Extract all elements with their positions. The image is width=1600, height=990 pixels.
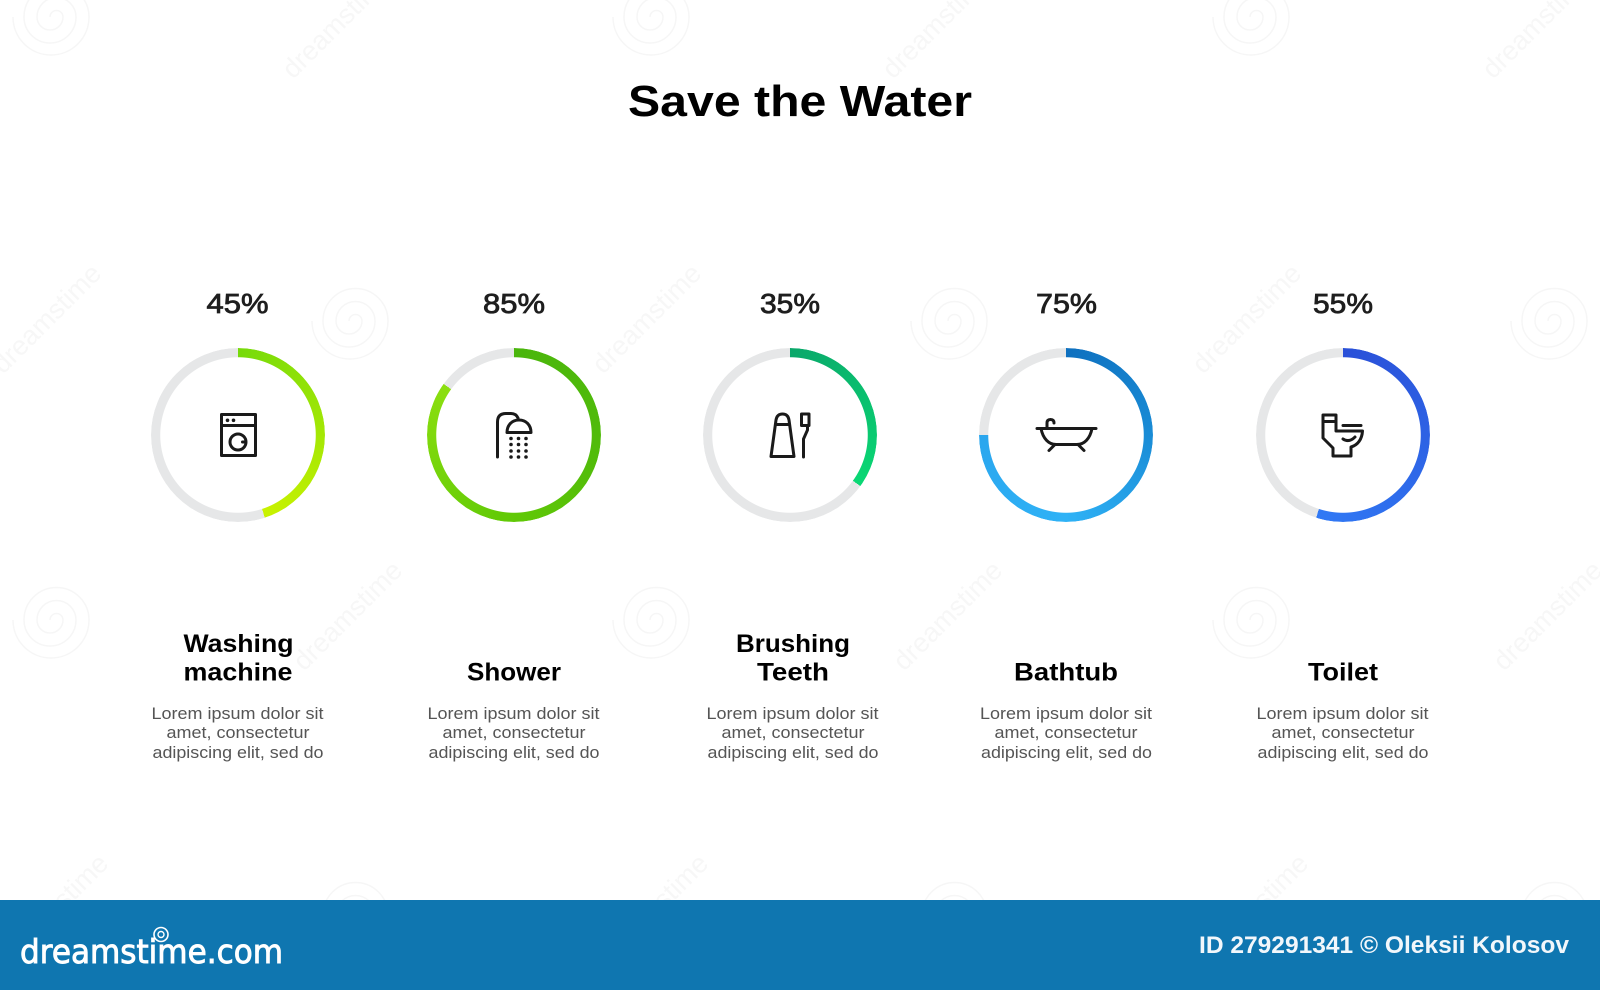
donut chart: 75%	[979, 348, 1153, 522]
heading: machine	[183, 658, 292, 686]
description: Lorem ipsum dolor sit	[706, 705, 879, 723]
panel: washing machine	[151, 288, 325, 762]
watermark pattern: dreamstime	[1193, 848, 1314, 969]
heading	[183, 630, 293, 686]
description: adipiscing elit, sed do	[428, 744, 600, 762]
footer bar	[0, 900, 1600, 990]
percentage: 55%	[1313, 288, 1373, 319]
panel: brushing teeth	[703, 288, 879, 762]
description	[151, 705, 323, 762]
description	[1256, 705, 1429, 762]
description: Lorem ipsum dolor sit	[428, 705, 600, 723]
watermark pattern: dreamstime	[887, 555, 1008, 676]
panel: toilet	[1256, 288, 1430, 762]
icon: washing machine	[221, 414, 255, 456]
heading: Brushing	[736, 630, 850, 658]
percentage: 45%	[206, 288, 268, 319]
watermark pattern: dreamstime	[586, 258, 707, 379]
description: Lorem ipsum dolor sit	[1256, 705, 1429, 723]
description	[706, 705, 879, 762]
heading: Shower	[467, 658, 561, 686]
description: amet, consectetur	[166, 724, 310, 742]
percentage: 85%	[483, 288, 545, 319]
panel: bathtub	[979, 288, 1153, 762]
description: Lorem ipsum dolor sit	[980, 705, 1152, 723]
description: amet, consectetur	[722, 724, 865, 742]
panel: shower	[427, 288, 601, 762]
percentage: 35%	[760, 288, 820, 319]
description: adipiscing elit, sed do	[981, 744, 1152, 762]
donut chart: 45%	[150, 348, 324, 522]
watermark pattern: dreamstime	[287, 555, 408, 676]
donut chart: 35%	[703, 348, 877, 522]
heading	[736, 630, 850, 686]
watermark pattern: dreamstime	[1186, 258, 1307, 379]
icon: toilet	[1323, 415, 1362, 456]
logo: dreamstime: dreamstime.com	[20, 932, 283, 971]
heading: Bathtub	[1014, 658, 1118, 686]
watermark pattern: dreamstime	[593, 848, 714, 969]
heading: Washing	[183, 630, 293, 658]
icon: bathtub	[1037, 420, 1096, 450]
icon: toothpaste and brush	[771, 414, 809, 457]
description: amet, consectetur	[1272, 724, 1415, 742]
donut chart: 85%	[427, 348, 601, 522]
description: adipiscing elit, sed do	[1258, 744, 1428, 762]
donut chart: 55%	[1256, 348, 1430, 522]
description	[980, 705, 1152, 762]
description	[428, 705, 600, 762]
description: adipiscing elit, sed do	[708, 744, 878, 762]
icon: shower	[498, 414, 531, 459]
description: amet, consectetur	[994, 724, 1138, 742]
description: amet, consectetur	[442, 724, 586, 742]
heading: Teeth	[757, 658, 829, 686]
image credit: ID 279291341 © Oleksii Kolosov	[1199, 932, 1570, 959]
description: adipiscing elit, sed do	[152, 744, 323, 762]
description: Lorem ipsum dolor sit	[151, 705, 323, 723]
title: Save the Water	[628, 77, 972, 126]
heading: Toilet	[1308, 658, 1379, 686]
percentage: 75%	[1036, 288, 1097, 319]
